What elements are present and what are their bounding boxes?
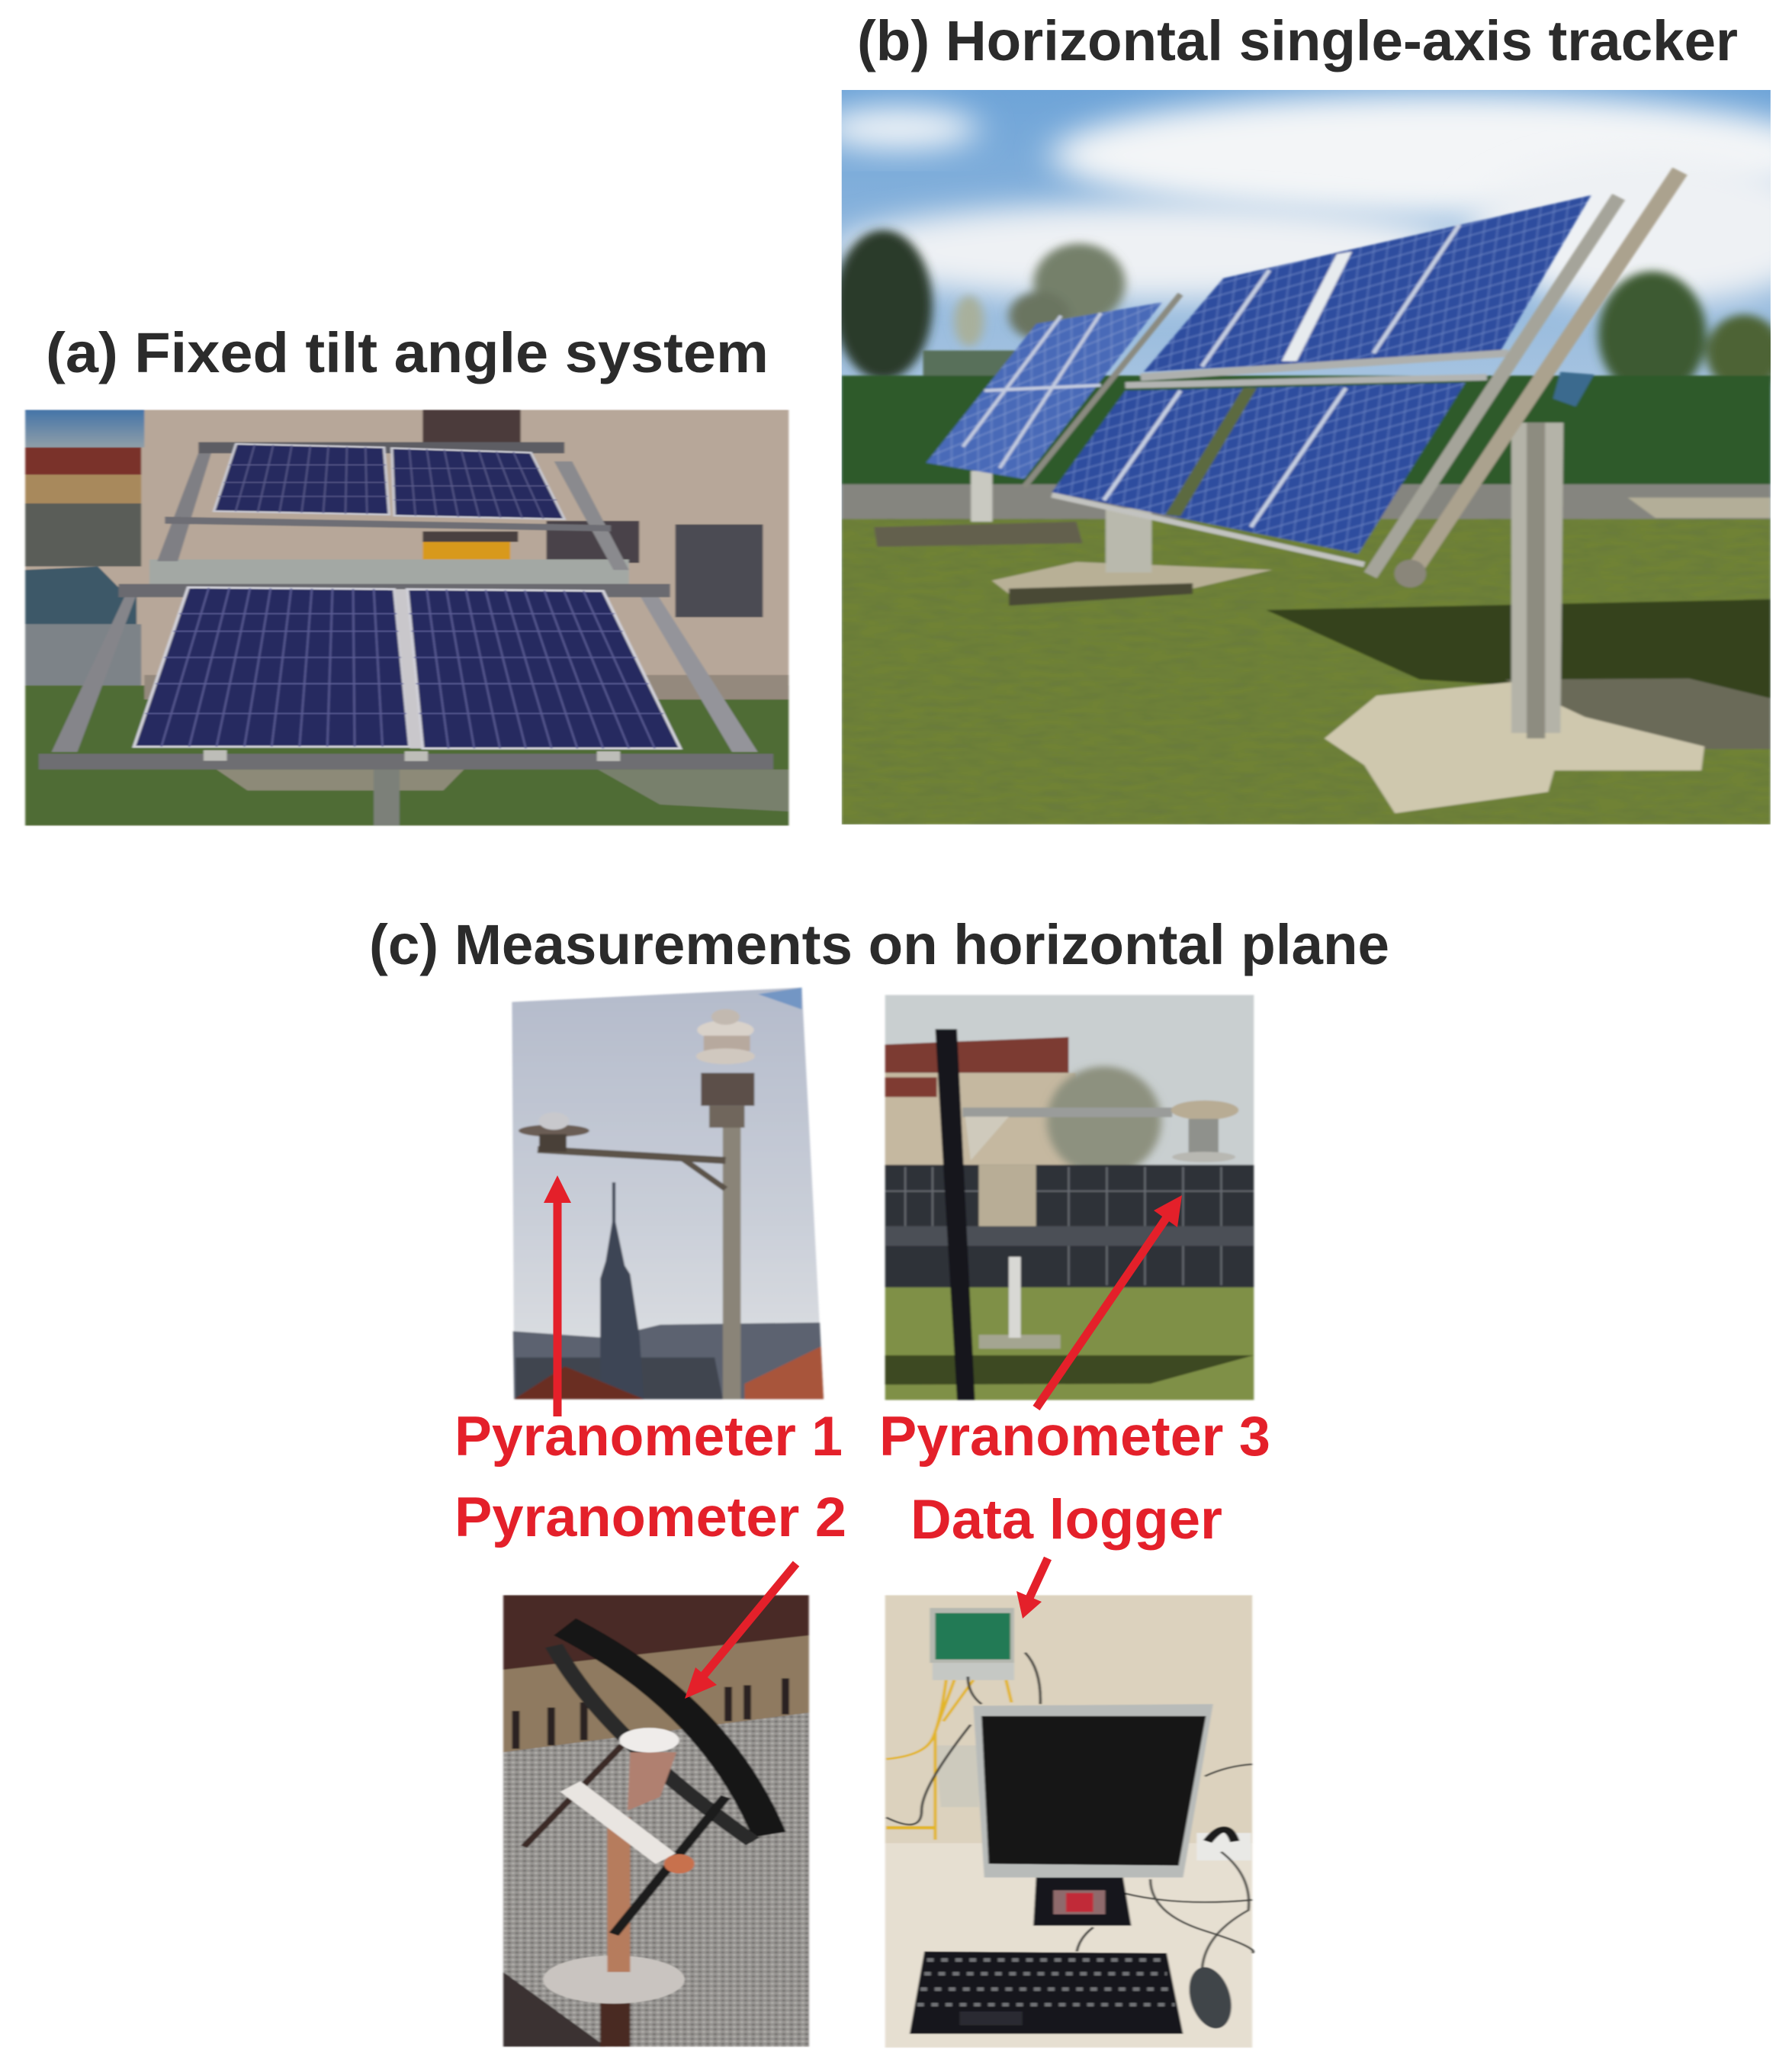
sub-element: left array xyxy=(927,294,1180,487)
heading: panel a: (a) Fixed tilt angle system xyxy=(46,321,769,384)
sub-element: tracker beams xyxy=(1370,171,1680,587)
sub-panel: lower right module xyxy=(407,589,680,748)
photo: tracker on grass xyxy=(819,90,1792,825)
panel: (a) fixed tilt angle system xyxy=(25,321,788,825)
arrow: to pyranometer 2 xyxy=(685,1564,796,1699)
panel: (c) measurements on horizontal plane xyxy=(369,913,1389,2047)
sub-panel: upper right module xyxy=(392,448,564,519)
label: pyranometer 2: Pyranometer 2 xyxy=(454,1487,846,1548)
arrow: to data logger xyxy=(1016,1558,1048,1619)
sub-element: main array upper half xyxy=(1141,195,1591,378)
arrow: to pyranometer 1 xyxy=(544,1175,571,1416)
sub-element: keyboard xyxy=(910,1951,1183,2033)
heading: panel c: (c) Measurements on horizontal plane xyxy=(369,913,1389,976)
sub-element: mouse xyxy=(1183,1966,1237,2030)
heading: panel b: (b) Horizontal single-axis tracker xyxy=(857,9,1738,72)
label: data logger: Data logger xyxy=(910,1489,1222,1551)
photo: pyranometer 3 on pole xyxy=(885,995,1254,1400)
sub-element: trees xyxy=(834,230,1782,397)
sub-element: data logger box xyxy=(930,1608,1014,1680)
label: pyranometer 1: Pyranometer 1 xyxy=(454,1406,843,1468)
sub-element: concrete bases xyxy=(874,522,1771,813)
sub-panel: upper left module xyxy=(214,444,389,515)
arrow: to pyranometer 3 xyxy=(1036,1195,1182,1408)
photo: data logger and computer xyxy=(885,1595,1253,2047)
label: pyranometer 3: Pyranometer 3 xyxy=(879,1406,1270,1468)
photo: pyranometer 1 on mast xyxy=(512,988,824,1399)
sub-element: monitor xyxy=(973,1704,1213,1878)
photo: fixed tilt panels xyxy=(25,410,788,825)
sub-element: main array lower half xyxy=(1052,378,1487,564)
panel: (b) horizontal single-axis tracker xyxy=(819,9,1792,825)
sub-panel: lower left module xyxy=(134,587,409,747)
sub-element: support posts xyxy=(971,423,1563,738)
photo: pyranometer 2 with shadow ring xyxy=(503,1595,809,2046)
